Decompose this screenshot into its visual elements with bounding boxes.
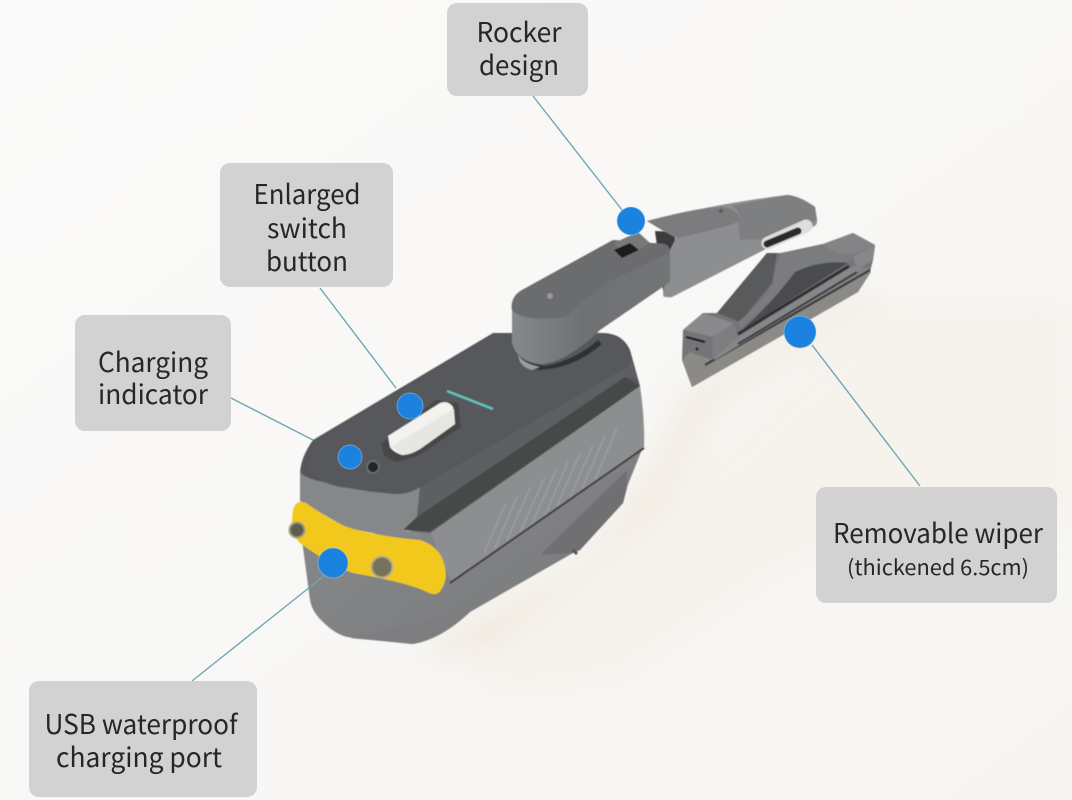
end block bbox=[823, 233, 875, 270]
switch button bbox=[381, 400, 461, 462]
indicator light bbox=[447, 391, 493, 409]
head block bbox=[683, 313, 738, 360]
front shoulder bbox=[300, 472, 427, 538]
callout: enlarged switch button bbox=[220, 163, 393, 287]
callout: removable wiper: Removable wiper bbox=[833, 512, 1043, 551]
callout: removable wiper: (thickened 6.5cm) bbox=[847, 552, 1029, 582]
callout: rocker design: Rocker bbox=[476, 11, 562, 50]
callout: rocker design: design bbox=[479, 44, 559, 83]
callout: usb waterproof charging port: charging port bbox=[56, 736, 222, 775]
arm joint bbox=[655, 231, 676, 297]
callout: charging indicator bbox=[75, 315, 231, 431]
callout: usb waterproof charging port bbox=[29, 681, 257, 797]
second arm bbox=[647, 195, 817, 297]
arch bbox=[717, 253, 777, 322]
callout: enlarged switch button: Enlarged bbox=[254, 173, 360, 212]
top face bbox=[308, 335, 628, 493]
callout: rocker design bbox=[447, 3, 588, 96]
charging indicator hole bbox=[367, 461, 379, 473]
floor shadow bbox=[410, 290, 880, 660]
callout: enlarged switch button: switch bbox=[267, 207, 347, 246]
top ridge bbox=[417, 360, 638, 517]
wiper blade bbox=[682, 233, 875, 387]
yellow latch bbox=[290, 502, 446, 594]
rubber strip bbox=[682, 268, 871, 387]
side panel bbox=[430, 386, 644, 583]
main body top shell bbox=[300, 333, 640, 538]
device illustration bbox=[290, 195, 875, 644]
callout: charging indicator: Charging bbox=[98, 341, 208, 380]
marker dots bbox=[318, 207, 816, 578]
first arm with pivot bbox=[512, 232, 670, 364]
leader lines bbox=[192, 96, 920, 681]
post collar bbox=[518, 340, 602, 370]
dark strip bbox=[403, 377, 640, 531]
main body lower section bbox=[302, 387, 643, 644]
wiper silhouette bbox=[682, 233, 875, 387]
callout: removable wiper bbox=[816, 487, 1057, 603]
callout: usb waterproof charging port: USB waterproof bbox=[44, 703, 239, 742]
callout: charging indicator: indicator bbox=[98, 373, 208, 412]
callout: enlarged switch button: button bbox=[266, 240, 348, 279]
side hatch bbox=[484, 428, 617, 553]
